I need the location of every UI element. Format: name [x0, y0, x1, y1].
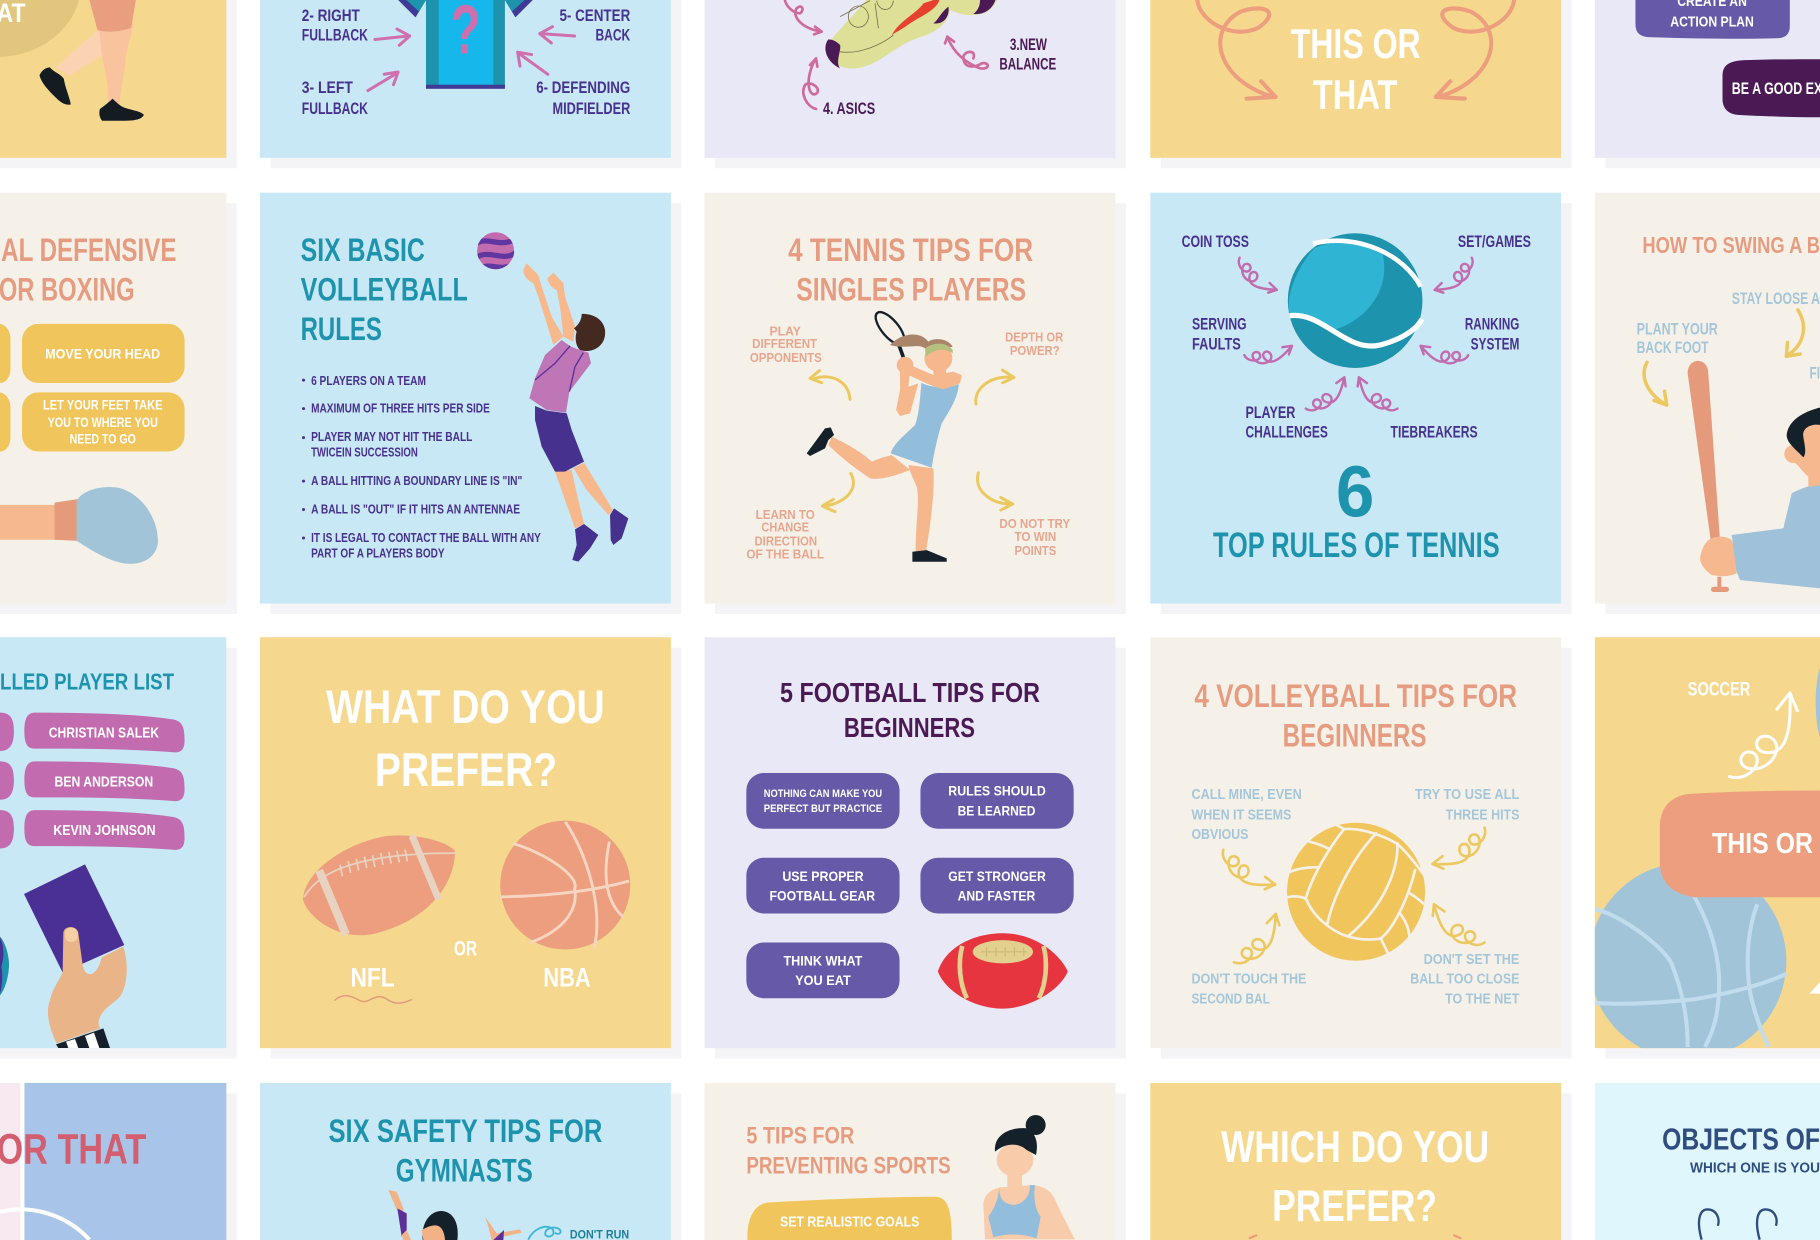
heading	[328, 1113, 602, 1189]
panel: called player list card	[0, 637, 226, 1048]
tip text: YOU EAT	[795, 972, 851, 988]
rules list: IT IS LEGAL TO CONTACT THE BALL WITH ANY	[311, 530, 541, 545]
tip text: MOVE YOUR HEAD	[45, 346, 160, 362]
rules list: A BALL HITTING A BOUNDARY LINE IS "IN"	[311, 473, 522, 488]
icon: gymnast	[388, 1190, 522, 1240]
icon: tennis player	[807, 308, 962, 562]
icon: purple volleyball	[476, 232, 515, 269]
player names: KEVIN JOHNSON	[53, 823, 156, 839]
tip labels: DIFFERENT	[752, 336, 817, 351]
tip labels: TO WIN	[1014, 529, 1056, 544]
rules list: PLAYER MAY NOT HIT THE BALL	[311, 429, 472, 444]
tip text: THINK WHAT	[783, 953, 863, 969]
position labels: BACK	[595, 27, 630, 45]
tip labels: TRY TO USE ALL	[1415, 786, 1519, 803]
tip labels	[1637, 290, 1820, 382]
heading	[0, 232, 176, 308]
position labels	[302, 7, 630, 118]
brand labels: 4. ASICS	[823, 100, 875, 118]
button: set realistic goals: SET REALISTIC GOALS	[780, 1214, 920, 1230]
arrow tips	[1249, 1235, 1461, 1238]
heading: BEGINNERS	[1283, 717, 1427, 753]
option labels	[351, 937, 591, 993]
tip buttons	[0, 324, 185, 452]
tip text: USE PROPER	[782, 868, 864, 884]
tip labels	[746, 323, 1070, 561]
squiggle	[334, 996, 412, 1003]
icon: blue ball corner	[1816, 667, 1820, 737]
icon: referee hand with card	[0, 864, 127, 1048]
rule labels: TIEBREAKERS	[1391, 424, 1478, 442]
panel: baseball swing card	[1595, 193, 1820, 604]
rules list: MAXIMUM OF THREE HITS PER SIDE	[311, 401, 490, 416]
heading: 5 TIPS FOR	[746, 1122, 855, 1149]
tip labels: THREE HITS	[1446, 806, 1519, 823]
icon: sneaker	[825, 0, 997, 69]
icon: boxing glove	[0, 487, 158, 564]
tip labels: PLANT YOUR	[1637, 320, 1718, 338]
tip labels: OBVIOUS	[1191, 826, 1248, 843]
heading	[326, 681, 605, 797]
rules list: 6 PLAYERS ON A TEAM	[311, 373, 426, 388]
heading	[780, 677, 1040, 743]
rules list: TWICEIN SUCCESSION	[311, 445, 418, 460]
panel: this or that basketball court card	[0, 1083, 226, 1240]
icon: batter	[1688, 361, 1820, 592]
rule labels: COIN TOSS	[1182, 233, 1249, 251]
tip text: PERFECT BUT PRACTICE	[764, 803, 882, 815]
rule labels: RANKING	[1465, 316, 1519, 334]
tip labels: DEPTH OR	[1005, 329, 1064, 344]
rule labels: SYSTEM	[1471, 335, 1519, 353]
tip labels	[1191, 786, 1520, 1007]
callout: this or	[1660, 790, 1820, 897]
rules list	[302, 373, 541, 561]
position labels: 2- RIGHT	[302, 7, 360, 25]
heading: 5 FOOTBALL TIPS FOR	[780, 677, 1040, 708]
tip labels: CALL MINE, EVEN	[1191, 786, 1302, 803]
label: soccer: SOCCER	[1688, 678, 1750, 700]
position labels: FULLBACK	[302, 100, 368, 118]
panel: volleyball rules card	[260, 193, 671, 604]
rule labels: SET/GAMES	[1458, 233, 1531, 251]
panel: what do you prefer card	[260, 637, 671, 1048]
tip labels: BACK FOOT	[1637, 339, 1709, 357]
heading: WHICH DO YOU	[1221, 1123, 1489, 1172]
position labels: 6- DEFENDING	[536, 79, 630, 97]
heading: SIX BASIC	[301, 232, 425, 268]
heading: THAT	[1313, 71, 1398, 118]
big number 6: 6	[1336, 453, 1374, 533]
heading: TOP RULES OF TENNIS	[1213, 526, 1500, 565]
icon: tennis ball	[1288, 233, 1422, 368]
panel: tennis tips card	[705, 193, 1115, 604]
icon: basketball	[500, 821, 630, 949]
tip text	[764, 783, 1046, 988]
arrows: curly pointers	[1223, 825, 1485, 965]
tip labels: DO NOT TRY	[999, 516, 1070, 531]
tip labels: DON'T TOUCH THE	[1191, 971, 1306, 988]
icon: woman in sports top	[983, 1115, 1075, 1239]
heading: 4 VOLLEYBALL TIPS FOR	[1194, 678, 1517, 714]
arrows: yellow curves	[810, 370, 1014, 512]
rule labels	[1182, 233, 1531, 442]
brand labels: 3.NEW	[1010, 36, 1047, 54]
tip text: GET STRONGER	[948, 868, 1046, 884]
player names: CHRISTIAN SALEK	[49, 726, 159, 742]
option labels: NFL	[351, 963, 395, 993]
arrows: yellow curves	[1644, 310, 1804, 405]
heading	[1221, 1123, 1489, 1231]
arrows: salmon spirals	[1197, 0, 1514, 99]
arrow tip	[1810, 982, 1820, 994]
tip labels: OF THE BALL	[746, 546, 824, 561]
tip labels: BALL TOO CLOSE	[1410, 971, 1519, 988]
tip text: RULES SHOULD	[948, 783, 1046, 799]
heading	[746, 1122, 951, 1179]
tip labels: DIRECTION	[754, 534, 817, 549]
panel: action plan card	[1595, 0, 1820, 158]
panel: objects card	[1595, 1083, 1820, 1240]
arrows: curly pointers	[1237, 258, 1474, 417]
position labels: 5- CENTER	[559, 7, 630, 25]
panel: running figure card	[0, 0, 226, 158]
heading	[1291, 20, 1421, 118]
panel: rules of tennis card	[1150, 193, 1561, 604]
tip labels: SECOND BAL	[1191, 990, 1270, 1007]
panel: soccer this or that card	[1589, 637, 1820, 1060]
icon: yellow volleyball	[1287, 823, 1425, 961]
tip text: NOTHING CAN MAKE YOU	[764, 788, 882, 800]
heading	[1194, 678, 1517, 753]
option labels: OR	[454, 937, 477, 960]
tip text: BE LEARNED	[958, 802, 1035, 818]
heading: OR THAT	[0, 1126, 146, 1174]
panel: gymnast safety card	[260, 1083, 671, 1240]
brand labels: BALANCE	[999, 56, 1056, 74]
heading: THIS OR	[1291, 20, 1421, 67]
player name pills	[0, 713, 185, 850]
panel: running shoe brands card	[705, 0, 1115, 158]
panel: which do you prefer card	[1150, 1083, 1561, 1240]
brand labels	[823, 36, 1056, 118]
tip text: NEED TO GO	[70, 430, 136, 446]
heading: AL DEFENSIVE	[1, 232, 176, 268]
tip labels: PLAY	[770, 323, 801, 338]
heading: WHAT DO YOU	[326, 681, 605, 734]
tip text: FOOTBALL GEAR	[770, 888, 875, 904]
tip labels: LEARN TO	[756, 507, 815, 522]
heading: 4 TENNIS TIPS FOR	[788, 232, 1033, 268]
button: create an action plan: ACTION PLAN	[1670, 14, 1754, 31]
tip labels: TO THE NET	[1445, 990, 1520, 1007]
arrow: cyan curl	[528, 1227, 561, 1240]
court arc	[0, 1209, 89, 1240]
player names: BEN ANDERSON	[55, 774, 153, 790]
arrow: white spiral	[1727, 693, 1800, 778]
heading: RULES	[301, 311, 382, 347]
icon: blue basketball	[1589, 862, 1786, 1060]
icon: hooks	[1699, 1209, 1777, 1240]
rule labels: PLAYER	[1245, 404, 1296, 422]
position labels: MIDFIELDER	[552, 100, 630, 118]
tip buttons	[746, 773, 1074, 998]
tip text	[43, 346, 163, 446]
heading: SINGLES PLAYERS	[796, 272, 1026, 308]
tip labels: POINTS	[1014, 543, 1056, 558]
panel: football tips card	[705, 637, 1115, 1048]
heading: PREVENTING SPORTS	[746, 1152, 951, 1179]
heading	[788, 232, 1033, 308]
position labels: 3- LEFT	[302, 79, 353, 97]
heading: OR BOXING	[0, 272, 135, 308]
tip labels: CHANGE	[761, 520, 809, 535]
icon: tan circle with text	[0, 0, 79, 57]
heading: PREFER?	[375, 744, 557, 797]
button: set realistic goals	[747, 1197, 952, 1240]
heading: GYMNASTS	[396, 1153, 533, 1189]
arrows: curly pointers	[785, 1, 988, 109]
tip labels: WHEN IT SEEMS	[1191, 806, 1291, 823]
panel: volleyball tips card	[1150, 637, 1561, 1048]
panel: preventing injuries card	[705, 1083, 1115, 1240]
tip text: AND FASTER	[958, 888, 1035, 904]
icon: running legs	[39, 0, 144, 121]
icon: red football	[938, 933, 1068, 1009]
tip labels: POWER?	[1010, 343, 1060, 358]
heading: VOLLEYBALL	[301, 272, 468, 308]
heading: BEGINNERS	[844, 712, 975, 743]
icon: jersey with question mark	[398, 0, 533, 89]
button: be a good example	[1722, 59, 1820, 117]
panel: football positions card	[260, 0, 671, 158]
rule labels: FAULTS	[1192, 335, 1241, 353]
rule labels: CHALLENGES	[1245, 424, 1328, 442]
button: create an action plan	[1635, 0, 1790, 39]
heading	[301, 232, 468, 347]
tip text: LET YOUR FEET TAKE	[43, 397, 162, 413]
icon: jumping player	[523, 263, 628, 562]
tip labels: DON'T SET THE	[1424, 951, 1519, 968]
rules list: PART OF A PLAYERS BODY	[311, 546, 445, 561]
icon: american football	[303, 835, 455, 935]
position labels: FULLBACK	[302, 27, 368, 45]
tip labels: OPPONENTS	[750, 350, 822, 365]
arrows: pink pointers	[368, 27, 575, 91]
option labels: NBA	[543, 963, 591, 993]
heading: PREFER?	[1272, 1182, 1437, 1231]
heading: LLED PLAYER LIST	[0, 668, 174, 694]
rule labels: SERVING	[1192, 316, 1247, 334]
panel: this or that card	[1150, 0, 1561, 158]
panel: defensive boxing card	[0, 193, 226, 604]
rules list: A BALL IS "OUT" IF IT HITS AN ANTENNAE	[311, 502, 520, 517]
player names	[49, 726, 159, 839]
heading: SIX SAFETY TIPS FOR	[328, 1113, 602, 1149]
tip text: YOU TO WHERE YOU	[48, 414, 158, 430]
